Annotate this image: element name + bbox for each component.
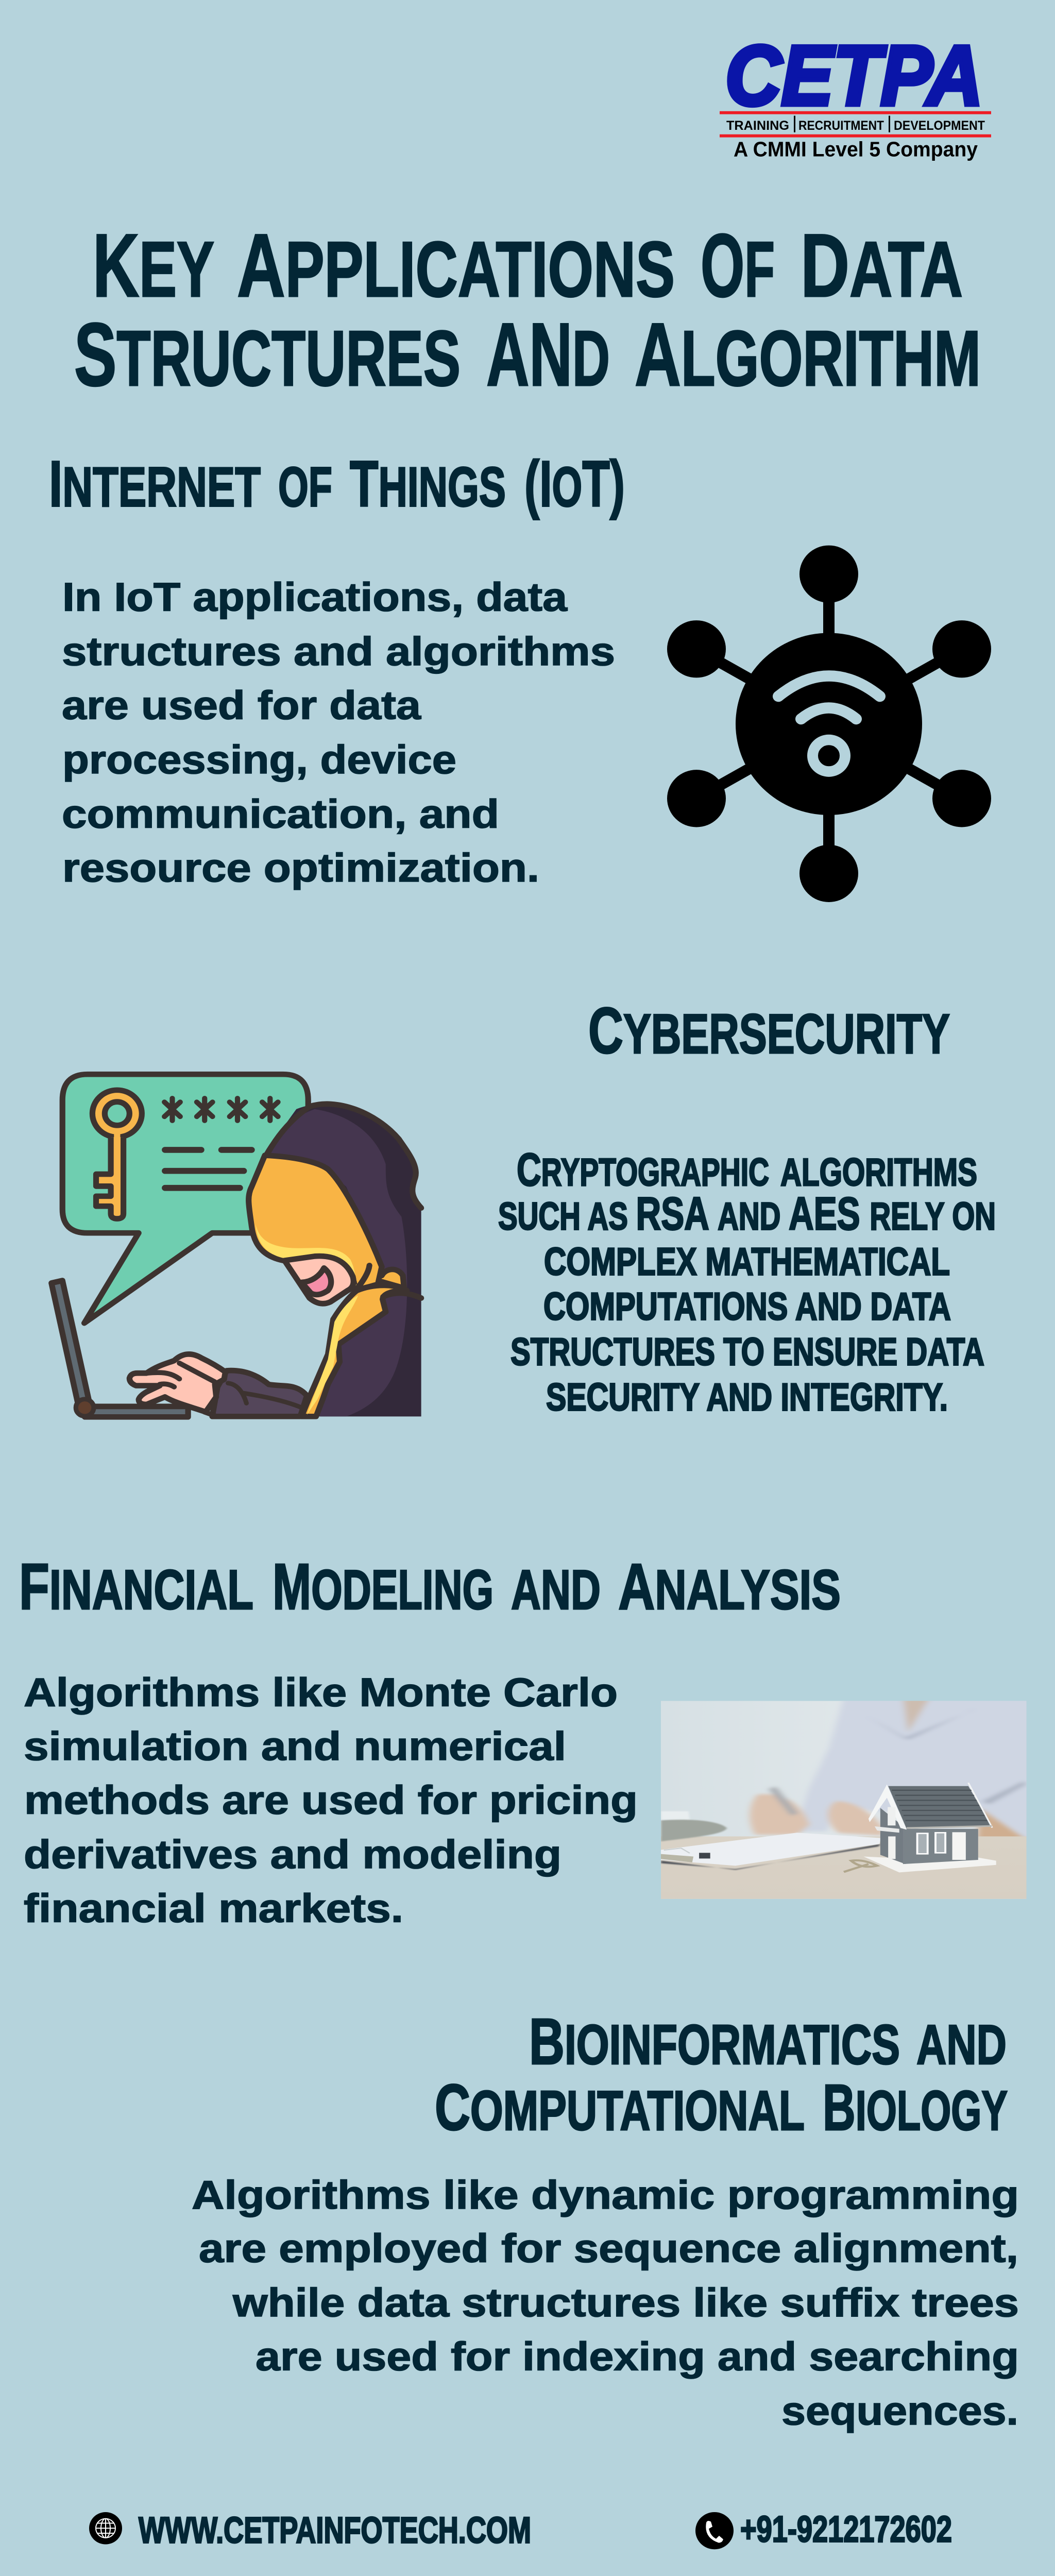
text: IoT description: resource optimization. <box>62 845 539 890</box>
icon: globe <box>89 2512 122 2544</box>
scarf highlight <box>307 1296 358 1415</box>
text: Financial description: derivatives and modeling <box>24 1832 561 1877</box>
face <box>284 1256 353 1303</box>
title: STRUCTURES <box>74 305 461 405</box>
heading: Internet of Things (IoT): INTERNET <box>49 448 261 520</box>
heading: Financial Modeling and Analysis: MODELING <box>273 1551 494 1623</box>
desk <box>661 1836 1027 1899</box>
photo background <box>661 1701 1027 1899</box>
title: KEY <box>93 216 214 316</box>
text: IoT description: In IoT applications, data <box>62 574 568 619</box>
phone number: +91-9212172602 <box>740 2509 952 2550</box>
text: Financial description: methods are used for pricing <box>24 1777 638 1822</box>
clipboard <box>661 1844 881 1870</box>
clipboard clip <box>661 1854 693 1862</box>
title <box>74 216 981 405</box>
heading: Bioinformatics and Computational Biology <box>435 2006 1008 2144</box>
text: Bioinformatics description: are employed for sequence alignment, <box>199 2225 1018 2270</box>
hand <box>129 1354 226 1412</box>
text: Cybersecurity description: SUCH AS RSA AND AES RELY ON <box>498 1189 996 1240</box>
text: Bioinformatics description: sequences. <box>781 2388 1018 2433</box>
text: IoT description: processing, device <box>62 737 456 782</box>
title: APPLICATIONS <box>237 216 675 316</box>
title: DATA <box>801 216 963 316</box>
logo tagline: DEVELOPMENT <box>894 118 985 133</box>
text: Bioinformatics description <box>192 2172 1019 2433</box>
laptop screen <box>52 1281 89 1405</box>
hood back <box>262 1104 421 1416</box>
arm <box>212 1370 307 1416</box>
text: IoT description: communication, and <box>62 791 499 836</box>
hood inner opening <box>249 1156 382 1291</box>
footer: phone <box>695 2509 952 2550</box>
notebook stack <box>661 1811 727 1841</box>
illustration: hacker with laptop and password speech bubble <box>52 1074 421 1417</box>
roof <box>888 1786 992 1829</box>
logo tagline <box>726 118 985 133</box>
logo: CETPA <box>720 29 991 161</box>
text: Bioinformatics description: Algorithms like dynamic programming <box>192 2172 1019 2217</box>
footer: website <box>89 2510 531 2551</box>
shirt <box>804 1701 1026 1836</box>
text: Financial description: financial markets. <box>24 1885 403 1930</box>
hood front <box>262 1109 407 1416</box>
heading: Internet of Things (IoT): (IOT) <box>524 448 625 520</box>
logo wordmark: CETPA <box>725 29 983 123</box>
icon: key <box>92 1090 142 1219</box>
heading: Bioinformatics and Computational Biology: BIOINFORMATICS <box>529 2006 900 2078</box>
heading: Bioinformatics and Computational Biology: COMPUTATIONAL <box>435 2072 805 2144</box>
icon: IoT network with wifi <box>667 546 991 902</box>
gable <box>869 1785 907 1829</box>
heading: Internet of Things (IoT): THINGS <box>350 448 506 520</box>
scarf <box>302 1285 407 1416</box>
title: AND <box>486 305 610 405</box>
text: Cybersecurity description: ALGORITHMS <box>780 1151 977 1194</box>
text: Cybersecurity description: COMPUTATIONS AND DATA <box>543 1285 951 1328</box>
logo tagline rules <box>720 111 991 138</box>
website text: WWW.CETPAINFOTECH.COM <box>139 2510 531 2551</box>
photo: model house on desk with clipboard <box>661 1697 1033 1899</box>
windows and door <box>917 1834 928 1854</box>
text: IoT description: structures and algorithms <box>62 629 615 674</box>
text: IoT description: are used for data <box>62 682 421 727</box>
heading: Bioinformatics and Computational Biology: AND <box>916 2014 1007 2076</box>
heading: Financial Modeling and Analysis <box>19 1551 841 1623</box>
logo subtitle: A CMMI Level 5 Company <box>734 137 978 161</box>
keys <box>844 1860 877 1872</box>
logo tagline: RECRUITMENT <box>798 118 884 133</box>
house walls <box>880 1808 906 1864</box>
hood outline <box>252 1104 421 1208</box>
logo tagline: TRAINING <box>726 118 789 133</box>
text: Cybersecurity description <box>498 1144 996 1419</box>
heading: Internet of Things (IoT): OF <box>278 456 332 518</box>
text: Bioinformatics description: are used for indexing and searching <box>256 2333 1019 2379</box>
speech bubble <box>62 1074 308 1323</box>
hands and arm <box>750 1788 1027 1843</box>
title: OF <box>701 216 775 316</box>
hood yellow rim <box>256 1224 357 1290</box>
text: Financial description: simulation and numerical <box>24 1723 566 1769</box>
heading: Financial Modeling and Analysis: AND <box>511 1559 601 1621</box>
heading: Financial Modeling and Analysis: FINANCIAL <box>19 1551 253 1623</box>
text: Financial description <box>24 1669 638 1930</box>
password asterisks and text lines <box>164 1098 278 1188</box>
text: Financial description: Algorithms like Monte Carlo <box>24 1669 618 1715</box>
model house <box>863 1783 996 1872</box>
text: IoT description <box>62 574 615 890</box>
mouth <box>302 1268 331 1295</box>
icon: phone <box>695 2512 734 2549</box>
scarf knot <box>355 1265 404 1291</box>
text: Bioinformatics description: while data structures like suffix trees <box>232 2280 1019 2325</box>
text: Cybersecurity description: CRYPTOGRAPHIC <box>517 1144 769 1196</box>
laptop base <box>85 1406 188 1417</box>
heading: Internet of Things (IoT) <box>49 448 625 520</box>
heading: Financial Modeling and Analysis: ANALYSIS <box>618 1551 841 1623</box>
text: Cybersecurity description: COMPLEX MATHEMATICAL <box>544 1240 950 1283</box>
text: Cybersecurity description: SECURITY AND INTEGRITY. <box>546 1376 948 1419</box>
house base <box>863 1856 996 1872</box>
